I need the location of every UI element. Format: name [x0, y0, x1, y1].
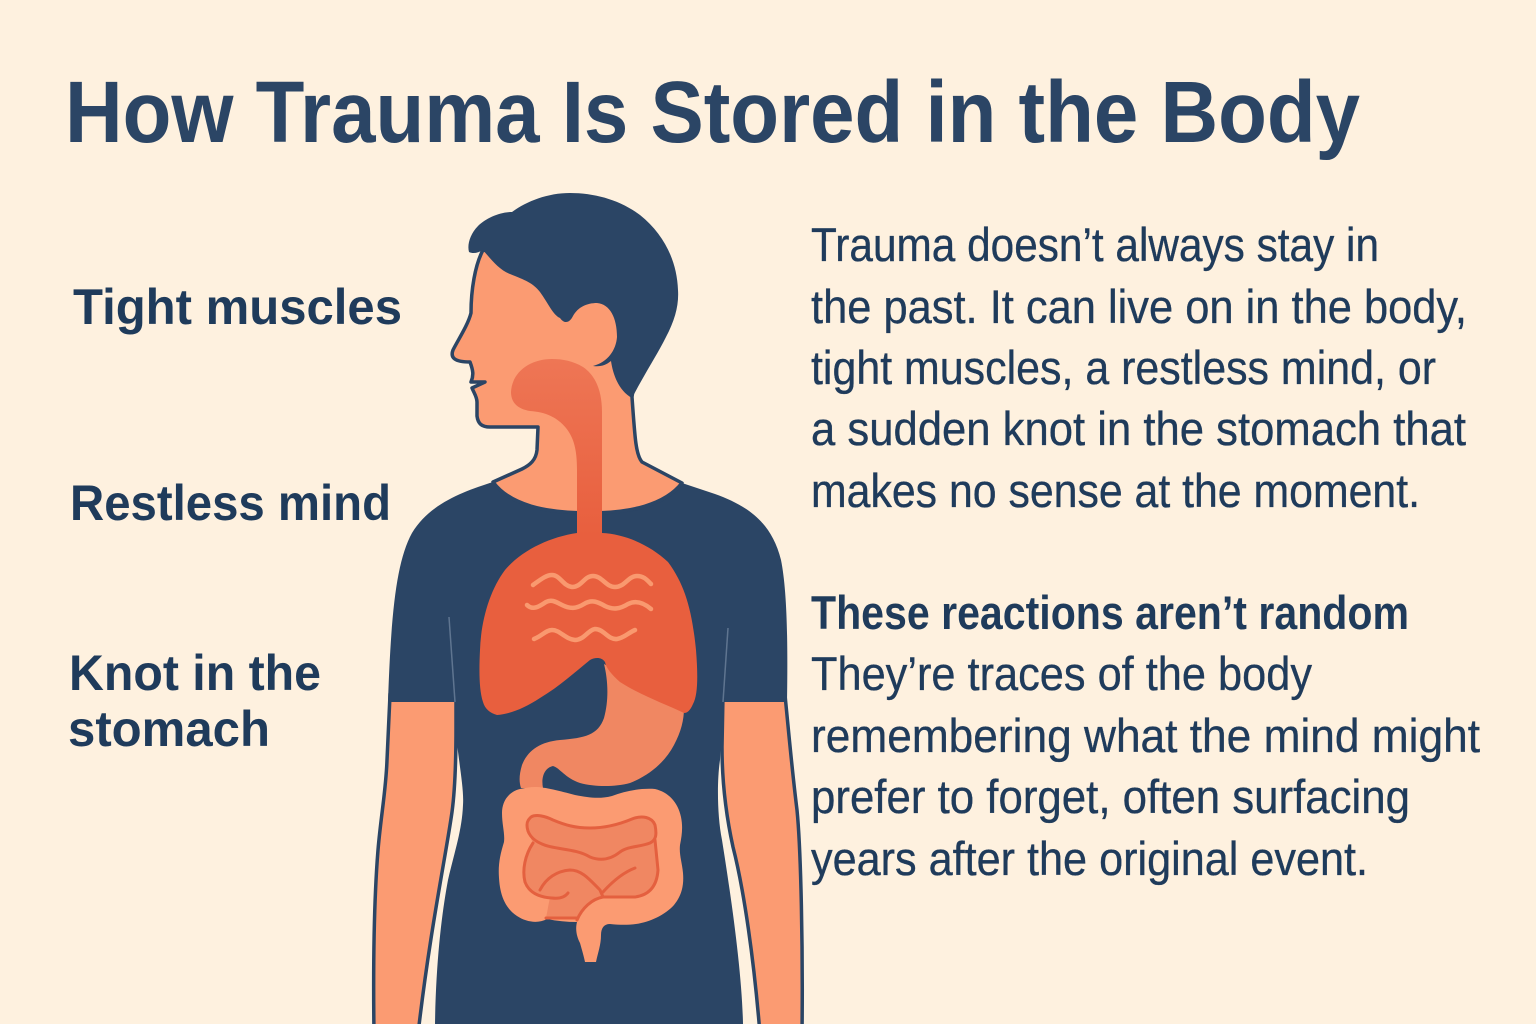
label: knot in the stomach: Knot in the	[69, 645, 321, 701]
second paragraph: prefer to forget, often surfacing	[811, 770, 1410, 823]
body paragraph: a sudden knot in the stomach that	[811, 402, 1466, 455]
lungs	[479, 533, 697, 715]
body paragraph: tight muscles, a restless mind, or	[811, 341, 1436, 394]
label: knot in the stomach	[68, 645, 321, 757]
right arm	[722, 695, 802, 1024]
inner coil fill	[524, 816, 657, 918]
torso and t-shirt	[388, 482, 787, 1024]
body paragraph: Trauma doesn’t always stay in	[811, 218, 1379, 271]
body paragraph	[811, 218, 1467, 517]
label: knot in the stomach: stomach	[68, 701, 270, 757]
small bowel loops	[524, 816, 658, 920]
label: restless mind: Restless mind	[70, 475, 391, 531]
face and neck	[452, 250, 682, 513]
title: How Trauma Is Stored in the Body	[65, 64, 1360, 161]
breath waves	[527, 575, 651, 640]
second paragraph: years after the original event.	[811, 832, 1368, 885]
hair	[468, 193, 678, 398]
subheading: These reactions aren’t random	[811, 586, 1409, 639]
body paragraph: makes no sense at the moment.	[811, 464, 1420, 517]
throat and esophagus	[511, 359, 602, 535]
sleeve seams	[449, 617, 728, 702]
symptom labels	[68, 279, 402, 757]
intestines	[499, 787, 683, 962]
body figure	[374, 193, 802, 1024]
second paragraph: remembering what the mind might	[811, 709, 1480, 762]
label: tight muscles: Tight muscles	[73, 279, 402, 335]
left arm	[374, 695, 456, 1024]
stomach	[520, 664, 684, 788]
second paragraph: They’re traces of the body	[811, 647, 1312, 700]
body paragraph: the past. It can live on in the body,	[811, 280, 1467, 333]
second paragraph	[811, 647, 1480, 885]
